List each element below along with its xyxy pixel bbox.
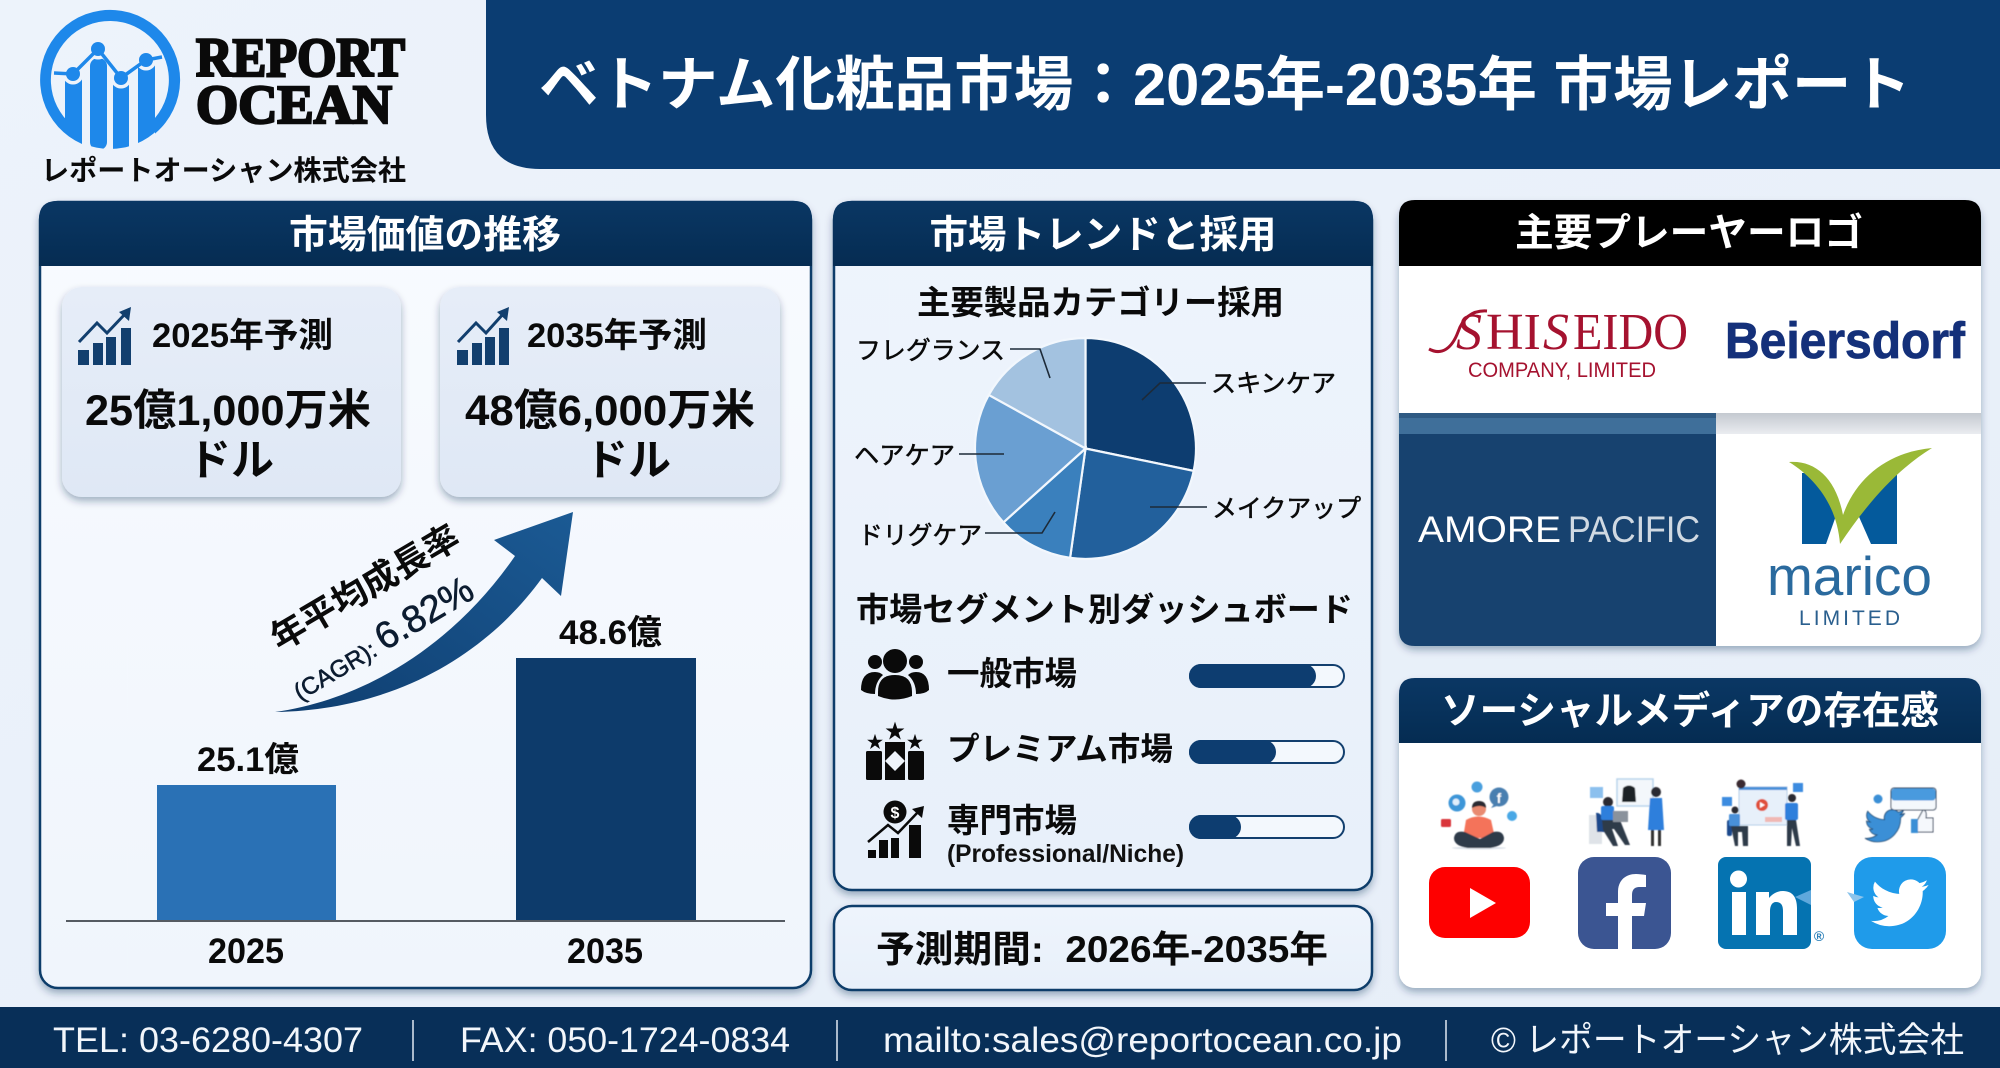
value label 2035: 48.6億 xyxy=(559,614,662,652)
logo: Shiseido: HI xyxy=(1486,304,1541,361)
bar: 2035 xyxy=(516,658,696,921)
icon: stars and podium: ★ xyxy=(866,733,884,752)
arrow: CAGR growth xyxy=(275,512,573,712)
icon: dollar and growth xyxy=(868,800,924,858)
icon: stars and podium: ★ xyxy=(885,721,905,743)
slice: makeup xyxy=(1070,448,1194,559)
logo: Beiersdorf: Beiersdorf xyxy=(1725,312,1966,369)
logo wordmark: REPORT xyxy=(196,27,405,88)
icon: Facebook xyxy=(1578,857,1671,949)
logo: Shiseido: S xyxy=(1456,304,1482,361)
bar: 2025 xyxy=(157,785,336,921)
CAGR label xyxy=(264,517,481,709)
pie leader lines and labels: メイクアップ xyxy=(1212,495,1361,523)
card: 2035 forecast xyxy=(440,287,780,497)
slice: fragrance xyxy=(989,338,1086,448)
panel heading: 市場価値の推移 xyxy=(289,214,561,257)
footer: fax: FAX: 050-1724-0834 xyxy=(460,1021,790,1060)
logo: Marico: LIMITED xyxy=(1799,607,1900,630)
axis label 2025: 2025 xyxy=(208,932,284,971)
panel heading xyxy=(833,201,1373,266)
row: general market xyxy=(861,649,1344,700)
footer: email: mailto:sales@reportocean.co.jp xyxy=(883,1021,1402,1060)
icon: stars and podium: ★ xyxy=(906,733,924,752)
panel heading xyxy=(1399,200,1981,266)
panel: market trends and adoption xyxy=(833,201,1373,890)
logo: Amorepacific xyxy=(1418,509,1700,550)
logo: Marico: marico xyxy=(1767,545,1932,607)
row: professional market: 専門市場 xyxy=(947,802,1077,839)
icon: dollar and growth: $ xyxy=(891,805,900,822)
panel heading xyxy=(39,201,812,266)
progress bar xyxy=(1189,740,1344,764)
icon: YouTube xyxy=(1429,867,1530,938)
progress bar xyxy=(1189,815,1344,839)
row: premium market xyxy=(866,721,1344,780)
card: 2025 forecast: 2025年予測 xyxy=(152,317,333,355)
panel: forecast period xyxy=(834,906,1372,990)
pie heading: 主要製品カテゴリー採用 xyxy=(917,284,1284,321)
panel heading: 主要プレーヤーロゴ xyxy=(1515,212,1863,255)
slice: drug care xyxy=(1003,448,1086,558)
card: 2035 forecast: ドル xyxy=(585,437,671,485)
logo: Marico xyxy=(1767,448,1932,630)
panel heading: 市場トレンドと採用 xyxy=(930,214,1276,257)
icon: logo chart in circle xyxy=(40,10,180,150)
panel: social media presence xyxy=(1399,678,1981,988)
value label 2025: 25.1億 xyxy=(197,741,299,779)
icon: LinkedIn: ® xyxy=(1814,928,1825,944)
slice: hair care xyxy=(975,395,1086,522)
bar chart xyxy=(66,614,785,971)
logo: Shiseido: S xyxy=(1543,304,1569,361)
logo: Amorepacific: PACIFIC xyxy=(1568,509,1700,550)
logo: Report Ocean xyxy=(40,10,406,186)
logo: Amorepacific: AMORE xyxy=(1418,509,1561,550)
band between logo rows xyxy=(1399,413,1981,434)
card: 2025 forecast: 25億1,000万米 xyxy=(85,387,371,435)
panel heading xyxy=(1399,678,1981,743)
row: premium market: プレミアム市場 xyxy=(947,731,1173,767)
dashboard heading: 市場セグメント別ダッシュボード xyxy=(856,591,1353,628)
illustration: person with social bubbles xyxy=(1441,782,1517,850)
row: professional market: (Professional/Niche) xyxy=(947,840,1184,868)
pie leader lines and labels: ヘアケア xyxy=(854,442,955,470)
logo: Shiseido: EIDO xyxy=(1573,304,1688,361)
card: 2035 forecast: 2035年予測 xyxy=(527,317,707,355)
pie leader lines and labels: スキンケア xyxy=(1211,370,1336,398)
icon: stars and podium xyxy=(866,721,924,780)
logo tile: Amorepacific background xyxy=(1399,434,1716,646)
panel: key player logos xyxy=(1399,200,1981,646)
illustration: two women at a screen xyxy=(1589,779,1664,846)
card: 2035 forecast: 48億6,000万米 xyxy=(465,387,755,435)
icon: people xyxy=(861,649,929,700)
footer bar xyxy=(0,1007,2000,1068)
progress bar xyxy=(1189,664,1344,688)
pie leader lines and labels: ドリグケア xyxy=(858,522,982,550)
footer: telephone: TEL: 03-6280-4307 xyxy=(53,1021,363,1060)
card: 2025 forecast: ドル xyxy=(188,437,274,485)
CAGR label: (CAGR): 6.82% xyxy=(283,569,481,709)
company name: レポートオーシャン株式会社 xyxy=(41,155,406,186)
icon: Twitter xyxy=(1847,857,1946,949)
row: professional market xyxy=(868,800,1344,868)
icon: LinkedIn xyxy=(1718,857,1825,949)
logo: Shiseido xyxy=(1429,304,1688,382)
illustration: person with social bubbles: f xyxy=(1497,790,1502,806)
icon: growth chart xyxy=(78,307,131,365)
logo wordmark: OCEAN xyxy=(196,74,392,135)
forecast text: 予測期間: 2026年-2035年 xyxy=(876,929,1328,970)
slice: skincare xyxy=(1086,338,1196,471)
row: general market: 一般市場 xyxy=(947,655,1077,692)
pie chart xyxy=(975,338,1196,559)
title: ベトナム化粧品市場：2025年-2035年 市場レポート xyxy=(539,52,1911,118)
logo wordmark xyxy=(196,27,405,135)
illustration: video presentation xyxy=(1722,780,1803,846)
card: 2025 forecast xyxy=(62,287,401,497)
title banner xyxy=(486,0,2000,169)
panel heading: ソーシャルメディアの存在感 xyxy=(1441,689,1939,733)
axis label 2035: 2035 xyxy=(567,932,643,971)
logo: Shiseido: COMPANY, LIMITED xyxy=(1468,359,1656,382)
pie leader lines and labels: フレグランス xyxy=(856,337,1005,365)
CAGR label: 年平均成長率 xyxy=(264,517,466,659)
illustration: bird and like xyxy=(1865,788,1936,842)
pie leader lines and labels xyxy=(854,337,1361,550)
panel: market value xyxy=(39,201,812,988)
icon: growth chart xyxy=(457,307,509,365)
footer: copyright: © レポートオーシャン株式会社 xyxy=(1491,1021,1964,1060)
